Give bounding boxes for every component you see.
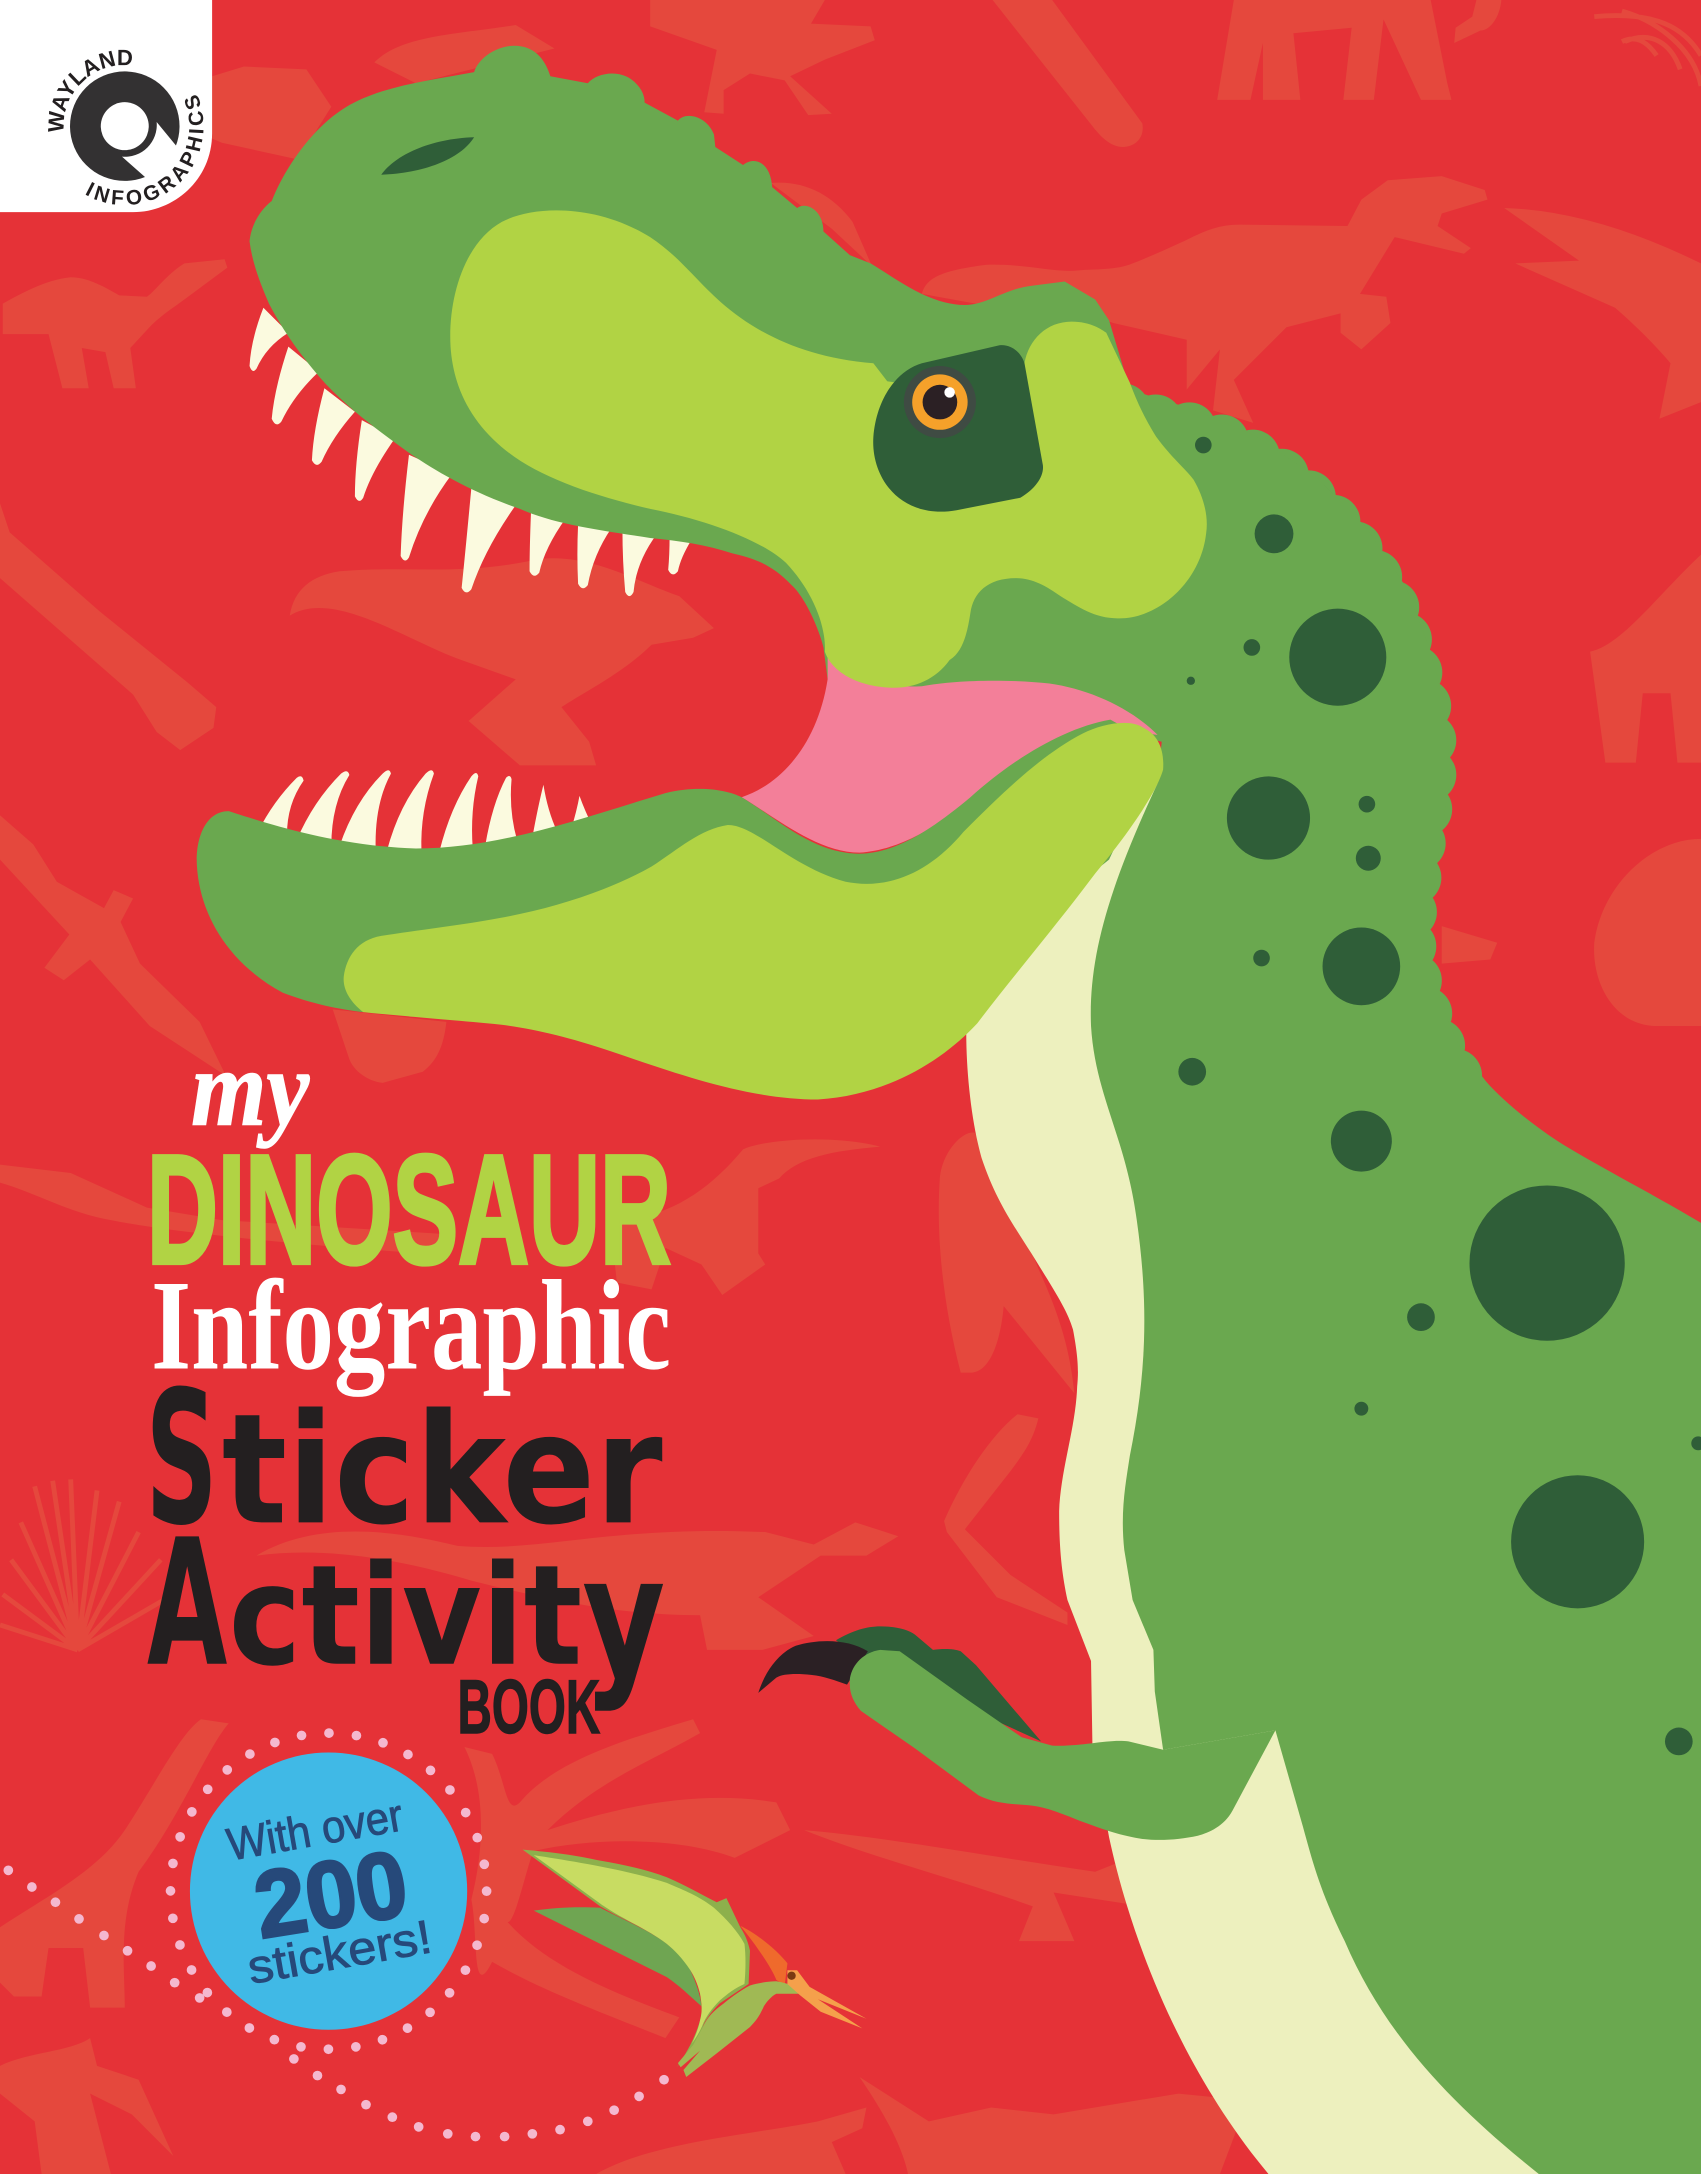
near wing — [534, 1855, 745, 2044]
title word activity — [147, 1503, 665, 1715]
logo text infographics: INFOGRAPHICS — [86, 95, 204, 205]
tongue — [742, 652, 1158, 853]
badge number 200: 200 — [247, 1830, 414, 1958]
title word sticker: ticker — [222, 1380, 663, 1558]
badge text with over: With over — [223, 1789, 407, 1871]
near wing edge — [523, 1850, 750, 2067]
nostril — [381, 137, 474, 175]
dotted flight trail — [3, 1733, 669, 2141]
body — [678, 1981, 800, 2077]
pterosaur eye — [787, 1972, 796, 1980]
body spots — [1178, 437, 1701, 1755]
cream throat and belly — [966, 783, 1567, 2174]
eye patch — [873, 345, 1043, 512]
upper teeth — [250, 308, 692, 596]
upper jaw highlight — [450, 210, 1207, 688]
title — [146, 1029, 671, 1750]
title word activity: A — [147, 1503, 227, 1706]
arm — [850, 1650, 1275, 1840]
claw — [758, 1641, 868, 1693]
title word activity: y — [582, 1522, 665, 1715]
logo text wayland: WAYLAND — [48, 50, 132, 132]
title word activity: ctivit — [229, 1535, 582, 1697]
publisher logo corner — [0, 0, 212, 212]
dark finger — [836, 1626, 1041, 1741]
title word dinosaur: DINOSAUR — [147, 1122, 671, 1296]
title word book: BOOK — [457, 1665, 600, 1750]
lower teeth — [258, 770, 592, 851]
title word my: my — [191, 1029, 310, 1148]
beak — [787, 1970, 866, 2028]
title word infographic: Infographic — [151, 1253, 671, 1397]
logo mark — [70, 71, 187, 181]
badge text stickers: stickers! — [243, 1909, 436, 1994]
pterosaur — [523, 1850, 866, 2077]
title word sticker — [146, 1352, 663, 1566]
eye — [904, 366, 976, 438]
far wing — [534, 1907, 701, 2006]
white corner panel — [0, 0, 212, 212]
neck back scales — [1123, 410, 1469, 1095]
blue circle — [190, 1753, 467, 2030]
background plant fans — [0, 11, 1701, 1650]
sticker badge — [190, 1753, 467, 2030]
neck — [740, 1926, 787, 1985]
title word sticker: S — [146, 1352, 218, 1566]
lower jaw — [197, 720, 1162, 1012]
lower jaw highlight — [344, 723, 1163, 1099]
ring of dots — [171, 1733, 487, 2049]
